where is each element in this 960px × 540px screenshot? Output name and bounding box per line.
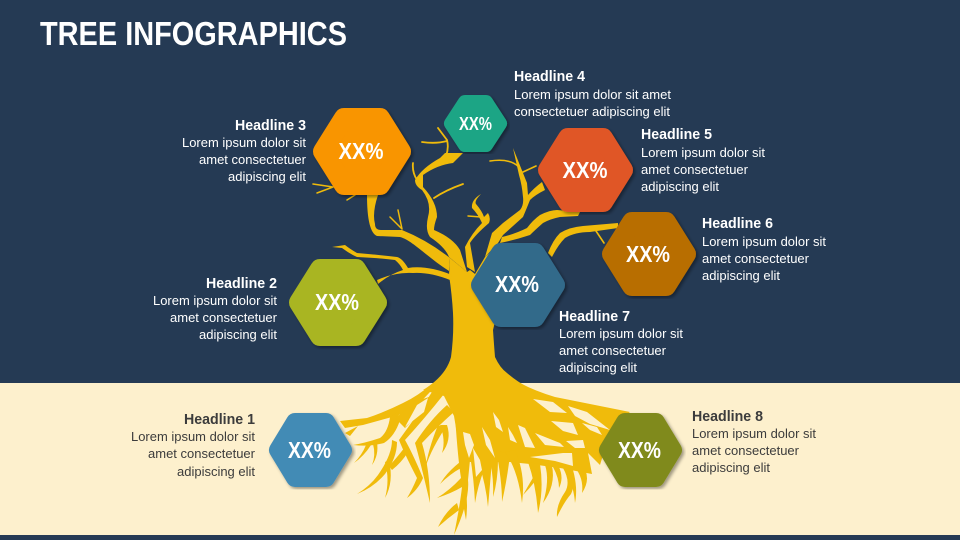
- text: headline 2: adipiscing elit: [199, 328, 278, 342]
- text: headline 2: amet consectetuer: [170, 311, 277, 325]
- text: headline 8: Headline 8: [692, 408, 763, 425]
- hexagon 1: blue: [278, 422, 343, 478]
- branch to headline 2: [332, 245, 452, 284]
- text: headline 2: [153, 275, 278, 342]
- text: headline 8: [692, 408, 817, 475]
- text: headline 5: Headline 5: [641, 126, 712, 143]
- trunk: [423, 243, 533, 390]
- text: headline 5: adipiscing elit: [641, 180, 720, 194]
- text: headline 4: [514, 68, 672, 119]
- text: headline 6: Headline 6: [702, 215, 773, 232]
- text: headline 4: Headline 4: [514, 68, 586, 85]
- hexagon 3: orange: XX%: [338, 138, 384, 164]
- text: headline 8: amet consectetuer: [692, 444, 799, 458]
- hexagon 7: steel blue: XX%: [495, 271, 539, 297]
- text: headline 1: Lorem ipsum dolor sit: [131, 430, 256, 444]
- tree illustration: [313, 128, 630, 535]
- text: headline 1: adipiscing elit: [177, 465, 256, 479]
- left roots: [345, 392, 454, 503]
- text: headline 1: [131, 411, 256, 479]
- text: headline 7: adipiscing elit: [559, 361, 638, 375]
- hexagon 1: blue: XX%: [288, 437, 331, 463]
- title: TREE INFOGRAPHICS: [40, 15, 347, 52]
- text: headline 7: Lorem ipsum dolor sit: [559, 327, 684, 341]
- text: headline 7: [559, 308, 684, 375]
- text: headline 6: amet consectetuer: [702, 252, 809, 266]
- text: headline 3: adipiscing elit: [228, 170, 307, 184]
- hexagon 7: steel blue: [481, 253, 555, 317]
- text: headline 3: amet consectetuer: [199, 153, 306, 167]
- root mass: [340, 383, 630, 474]
- hexagon 6: brown: XX%: [626, 241, 670, 267]
- text: headline 1: Headline 1: [184, 411, 255, 428]
- text: headline 7: amet consectetuer: [559, 344, 666, 358]
- text: headline 8: adipiscing elit: [692, 461, 771, 475]
- centre roots: [437, 416, 510, 535]
- hexagon 6: brown: [612, 222, 686, 286]
- text: headline 5: amet consectetuer: [641, 163, 748, 177]
- hexagon 8: olive: XX%: [618, 437, 661, 463]
- hexagon 4: green: [451, 102, 500, 145]
- text: headline 4: Lorem ipsum dolor sit amet: [514, 88, 672, 102]
- branch to headline 3: [313, 184, 450, 271]
- hexagon 5: red-orange: [548, 138, 623, 202]
- right roots: [505, 450, 587, 517]
- text: headline 2: Headline 2: [206, 275, 277, 292]
- branches to headlines 5 and 6: [485, 148, 618, 257]
- branch to headline 4: [413, 128, 467, 272]
- text: headline 6: adipiscing elit: [702, 269, 781, 283]
- hexagon 8: olive: [608, 422, 673, 478]
- text: headline 8: Lorem ipsum dolor sit: [692, 427, 817, 441]
- text: headline 4: consectetuer adipiscing elit: [514, 105, 671, 119]
- hexagon 2: lime: XX%: [315, 289, 359, 315]
- central small branch: [465, 194, 490, 272]
- hexagon 4: green: XX%: [459, 114, 492, 134]
- gaps between roots: [405, 398, 610, 477]
- hexagon 3: orange: [323, 118, 401, 185]
- text: headline 3: Headline 3: [235, 117, 306, 134]
- text: headline 5: [641, 126, 766, 194]
- text: headline 2: Lorem ipsum dolor sit: [153, 294, 278, 308]
- hexagon 2: lime: [299, 269, 377, 336]
- text: headline 3: [182, 117, 307, 184]
- text: headline 6: Lorem ipsum dolor sit: [702, 235, 827, 249]
- text: headline 5: Lorem ipsum dolor sit: [641, 146, 766, 160]
- ground panel: [0, 383, 960, 535]
- text: headline 3: Lorem ipsum dolor sit: [182, 136, 307, 150]
- text: headline 6: [702, 215, 827, 283]
- text: headline 7: Headline 7: [559, 308, 630, 325]
- text: headline 1: amet consectetuer: [148, 447, 255, 461]
- hexagon 5: red-orange: XX%: [562, 157, 608, 183]
